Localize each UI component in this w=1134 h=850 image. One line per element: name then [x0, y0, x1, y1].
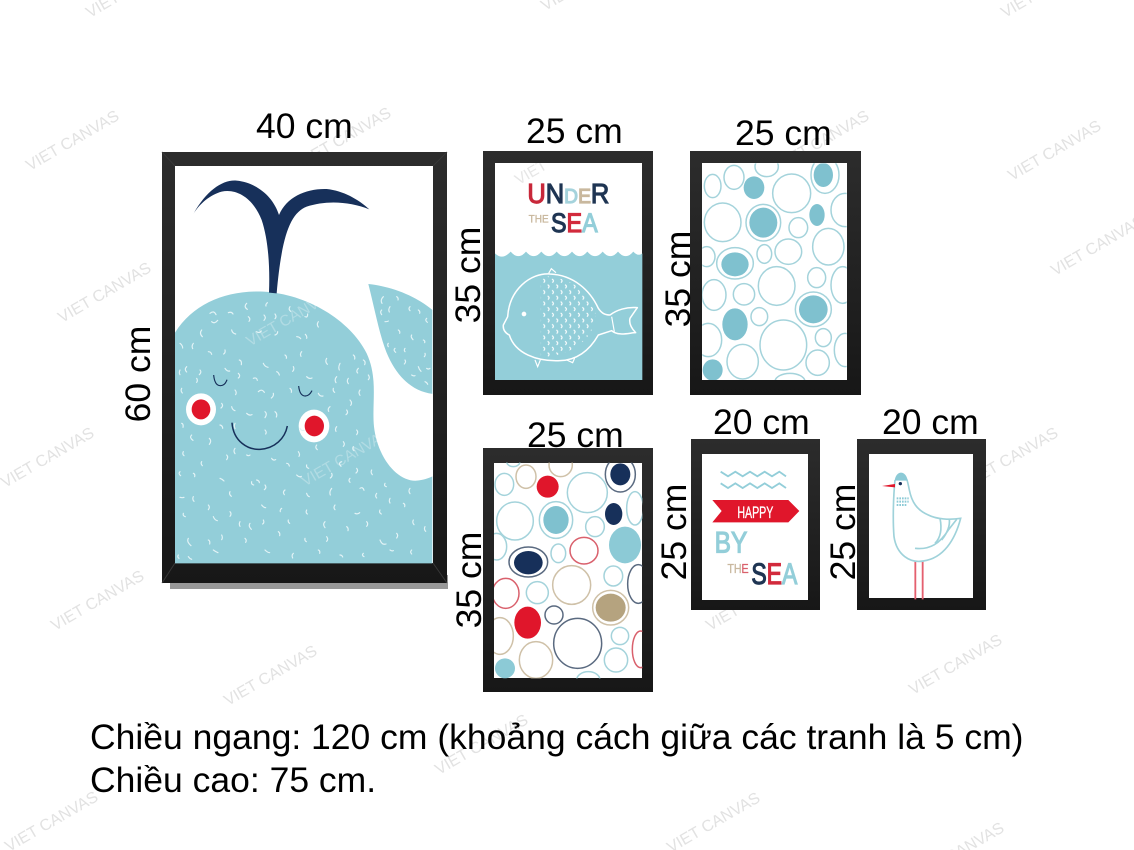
watermark layer: VIET CANVAS [906, 632, 1005, 699]
width label: 25 cm: 25 cm [527, 415, 624, 455]
width label: 20 cm: 20 cm [882, 402, 979, 442]
frame: under the sea poster 25x35 [483, 151, 653, 395]
watermark layer: VIET CANVAS [23, 108, 122, 175]
width label: 20 cm: 20 cm [713, 402, 810, 442]
dimension labels [118, 106, 979, 628]
frame: seagull poster 20x25 [857, 439, 986, 610]
illustration: coloured bubbles [494, 462, 642, 678]
width label: 25 cm: 25 cm [735, 113, 832, 153]
watermark layer: VIET CANVAS [773, 108, 872, 175]
frame: whale poster 40x60 [162, 152, 448, 589]
illustration: whale: VIET CANVAS [299, 425, 394, 490]
width label: 25 cm: 25 cm [526, 111, 623, 151]
height label: 35 cm: 35 cm [658, 231, 698, 327]
height label: 35 cm: 35 cm [449, 532, 489, 628]
watermark layer: VIET CANVAS [295, 105, 394, 172]
watermark layer: VIET CANVAS [703, 568, 802, 635]
caption: overall dimensions: Chiều ngang: 120 cm (khoảng cách giữa các tranh là 5 cm) [90, 717, 1023, 757]
watermark layer: VIET CANVAS [55, 260, 154, 327]
watermark layer: VIET CANVAS [0, 425, 97, 492]
height label: 25 cm: 25 cm [823, 484, 863, 580]
illustration: teal bubbles [702, 163, 847, 380]
watermark layer: VIET CANVAS [221, 643, 320, 710]
watermark layer: VIET CANVAS [1005, 118, 1104, 185]
illustration: fish and title: THE [529, 214, 549, 226]
frame: happy by the sea poster 20x25 [691, 439, 820, 610]
caption: overall dimensions: Chiều cao: 75 cm. [90, 760, 376, 800]
frame: coloured bubbles poster 25x35 [483, 448, 653, 692]
watermark layer: VIET CANVAS [48, 568, 147, 635]
fish [503, 269, 637, 367]
illustration: fish and title: SEA [551, 208, 598, 238]
frame: teal bubbles poster 25x35 [690, 151, 861, 395]
illustration: whale [175, 181, 433, 564]
illustration: happy by the sea: HAPPY [737, 503, 773, 522]
illustration: happy by the sea [712, 472, 799, 591]
illustration: seagull [882, 473, 961, 599]
height label: 35 cm: 35 cm [448, 227, 488, 323]
height label: 25 cm: 25 cm [654, 484, 694, 580]
watermark layer: VIET CANVAS [962, 425, 1061, 492]
caption: overall dimensions [90, 717, 1023, 800]
height label: 60 cm: 60 cm [118, 326, 158, 422]
illustration: happy by the sea: THE [727, 562, 749, 576]
illustration: happy by the sea: BY [715, 526, 747, 559]
illustration: fish and title: VIET [512, 157, 551, 189]
heading: under the sea: UNDER [527, 178, 609, 209]
illustration: fish and title [495, 157, 643, 380]
watermark layer: VIET CANVAS [432, 712, 531, 779]
width label: 40 cm: 40 cm [256, 106, 353, 146]
illustration: whale: VIET CANVAS [244, 285, 339, 350]
illustration: happy by the sea: SEA [751, 558, 798, 591]
